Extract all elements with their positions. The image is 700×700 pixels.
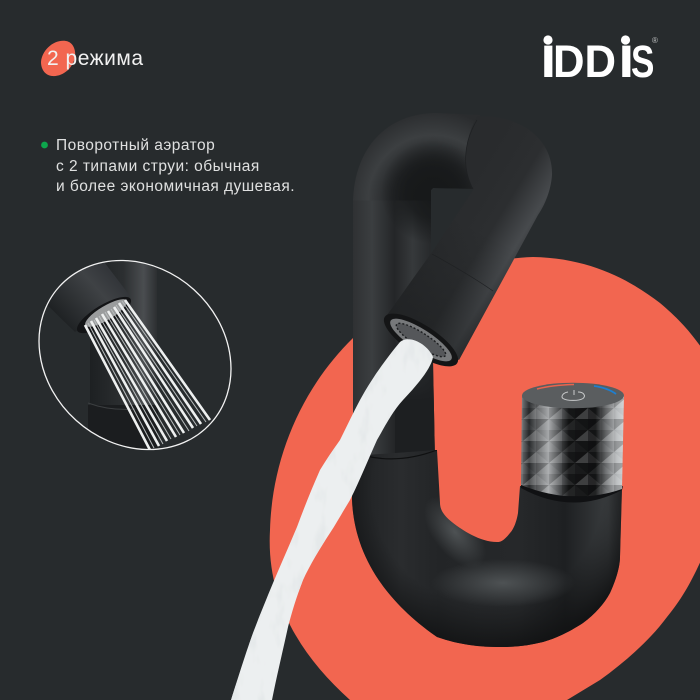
water stream (231, 339, 433, 700)
cold indicator (594, 386, 616, 394)
logo wordmark: D (584, 37, 616, 87)
logo: IDDIS (540, 35, 658, 87)
heading text: 2 режима (47, 47, 144, 70)
registered mark: ® (652, 36, 658, 45)
inset outline (0, 221, 270, 489)
feature description: с 2 типами струи: обычная (56, 158, 260, 175)
heading: 2 режима (41, 41, 144, 76)
logo dots (543, 35, 630, 45)
logo wordmark: I (618, 36, 634, 87)
logo wordmark: D (553, 37, 585, 87)
heading blob (41, 41, 75, 76)
faucet base U-shape (352, 450, 622, 647)
feature text block (41, 137, 295, 195)
feature description: Поворотный аэратор (56, 137, 215, 154)
handle knob (521, 383, 624, 503)
spout body (385, 116, 552, 360)
power icon (562, 390, 584, 400)
knob top (522, 383, 624, 408)
knob facets (521, 398, 624, 497)
logo wordmark (540, 36, 654, 87)
hot indicator (537, 384, 574, 389)
aerator (385, 312, 457, 368)
spout end ring (377, 304, 465, 376)
logo wordmark: I (540, 36, 556, 87)
feature description: и более экономичная душевая. (56, 178, 295, 195)
inset photo (48, 262, 211, 449)
green bullet (41, 142, 48, 148)
coral blob (270, 257, 700, 700)
aerator centre (393, 318, 449, 362)
inset: aerator close-up (38, 260, 232, 450)
faucet (231, 105, 630, 700)
faucet spout (377, 116, 552, 376)
logo wordmark: S (631, 36, 654, 87)
spout seam (432, 120, 493, 291)
collar (521, 484, 623, 503)
knob body (521, 395, 624, 497)
faucet column and top arch (353, 117, 472, 455)
spout end shading (385, 116, 552, 360)
